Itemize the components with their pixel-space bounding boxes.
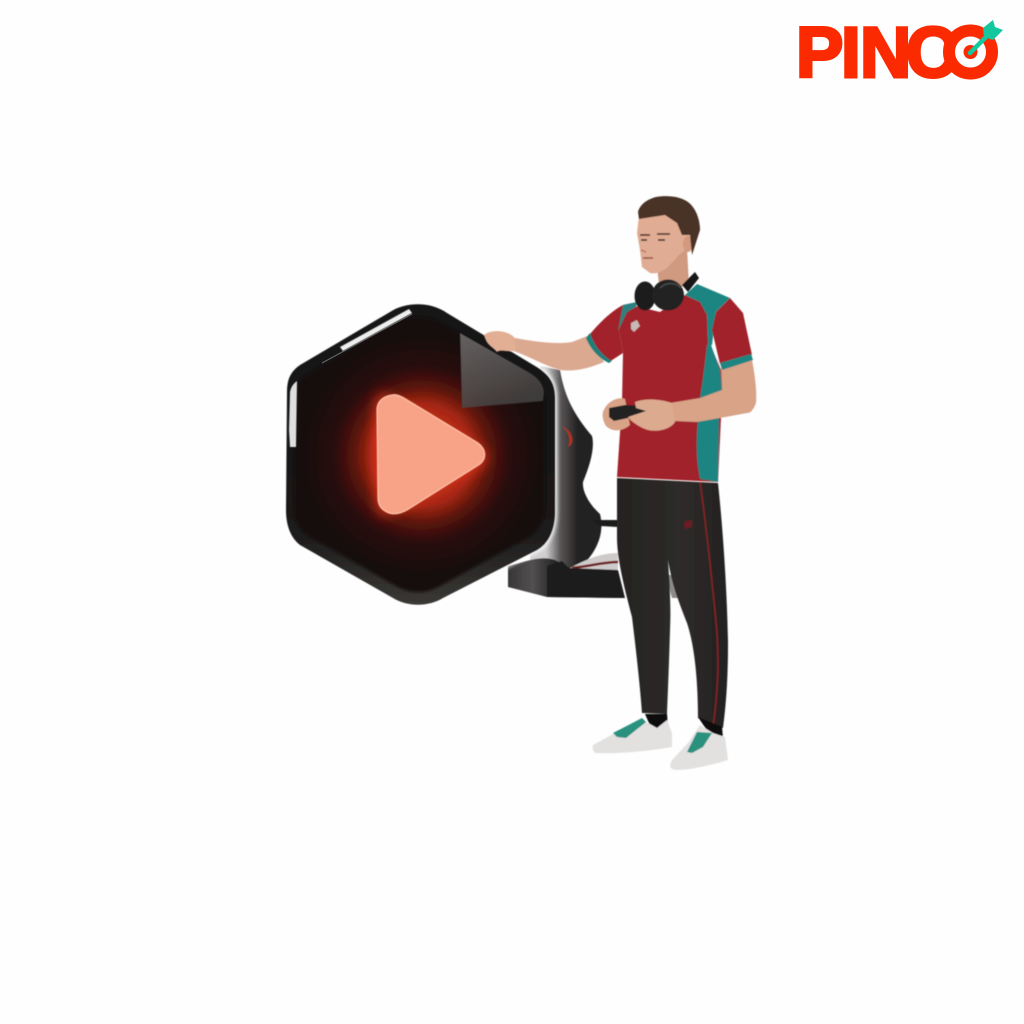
chair base xyxy=(508,558,625,598)
left sleeve trim xyxy=(586,333,612,363)
glass reflection panel xyxy=(460,333,544,408)
gaming chair xyxy=(508,366,682,598)
teal side panel xyxy=(700,345,722,398)
shirt crest xyxy=(631,320,640,332)
socks xyxy=(645,714,723,738)
person xyxy=(484,196,756,770)
chair red accent xyxy=(562,426,572,447)
chair base right stub xyxy=(665,575,682,598)
pants xyxy=(617,478,728,728)
head xyxy=(637,214,690,273)
chair back xyxy=(530,366,601,580)
controller xyxy=(609,405,647,421)
pants piping xyxy=(700,482,718,727)
neck xyxy=(657,248,689,292)
right shoe xyxy=(670,725,728,770)
logo: PINCO xyxy=(796,14,1003,93)
left arm xyxy=(510,335,604,371)
right hand xyxy=(628,399,675,431)
right sleeve trim xyxy=(720,354,753,370)
logo wordmark: P xyxy=(796,14,843,93)
teal shoulder panel xyxy=(685,284,730,345)
teal left shoulder xyxy=(618,302,637,331)
logo target xyxy=(949,20,1003,74)
hexagon white halo xyxy=(286,304,555,605)
chair seat xyxy=(570,553,618,575)
shirt body xyxy=(617,295,722,482)
chair seat trim xyxy=(572,562,618,568)
triangle outer glow xyxy=(377,396,485,513)
hair xyxy=(638,196,700,255)
left shoe xyxy=(593,720,672,753)
play button hexagon xyxy=(286,304,555,605)
right shoe laces xyxy=(687,732,712,753)
left edge highlight xyxy=(289,381,297,447)
left hand on controller xyxy=(603,398,630,430)
teal lower panel xyxy=(697,418,719,482)
hand on hexagon xyxy=(484,331,516,352)
pants logo xyxy=(684,520,692,529)
play triangle xyxy=(377,395,485,514)
logo wordmark: C xyxy=(906,14,957,93)
chair armrest xyxy=(591,520,618,527)
shirt left sleeve xyxy=(587,302,637,362)
chair base bracket xyxy=(547,561,625,598)
logo wordmark: I xyxy=(841,14,861,93)
right arm xyxy=(670,360,756,422)
ear xyxy=(683,236,693,252)
top left thin highlight xyxy=(322,314,412,363)
logo wordmark: N xyxy=(860,14,911,93)
shirt right sleeve xyxy=(712,298,752,364)
hexagon face xyxy=(294,317,545,592)
hexagon rim xyxy=(286,304,555,605)
left shoe laces xyxy=(613,718,646,738)
eyes and mouth xyxy=(640,234,670,258)
headphones xyxy=(634,272,699,310)
logo wordmark: O xyxy=(943,14,998,93)
top left highlight xyxy=(340,309,412,351)
